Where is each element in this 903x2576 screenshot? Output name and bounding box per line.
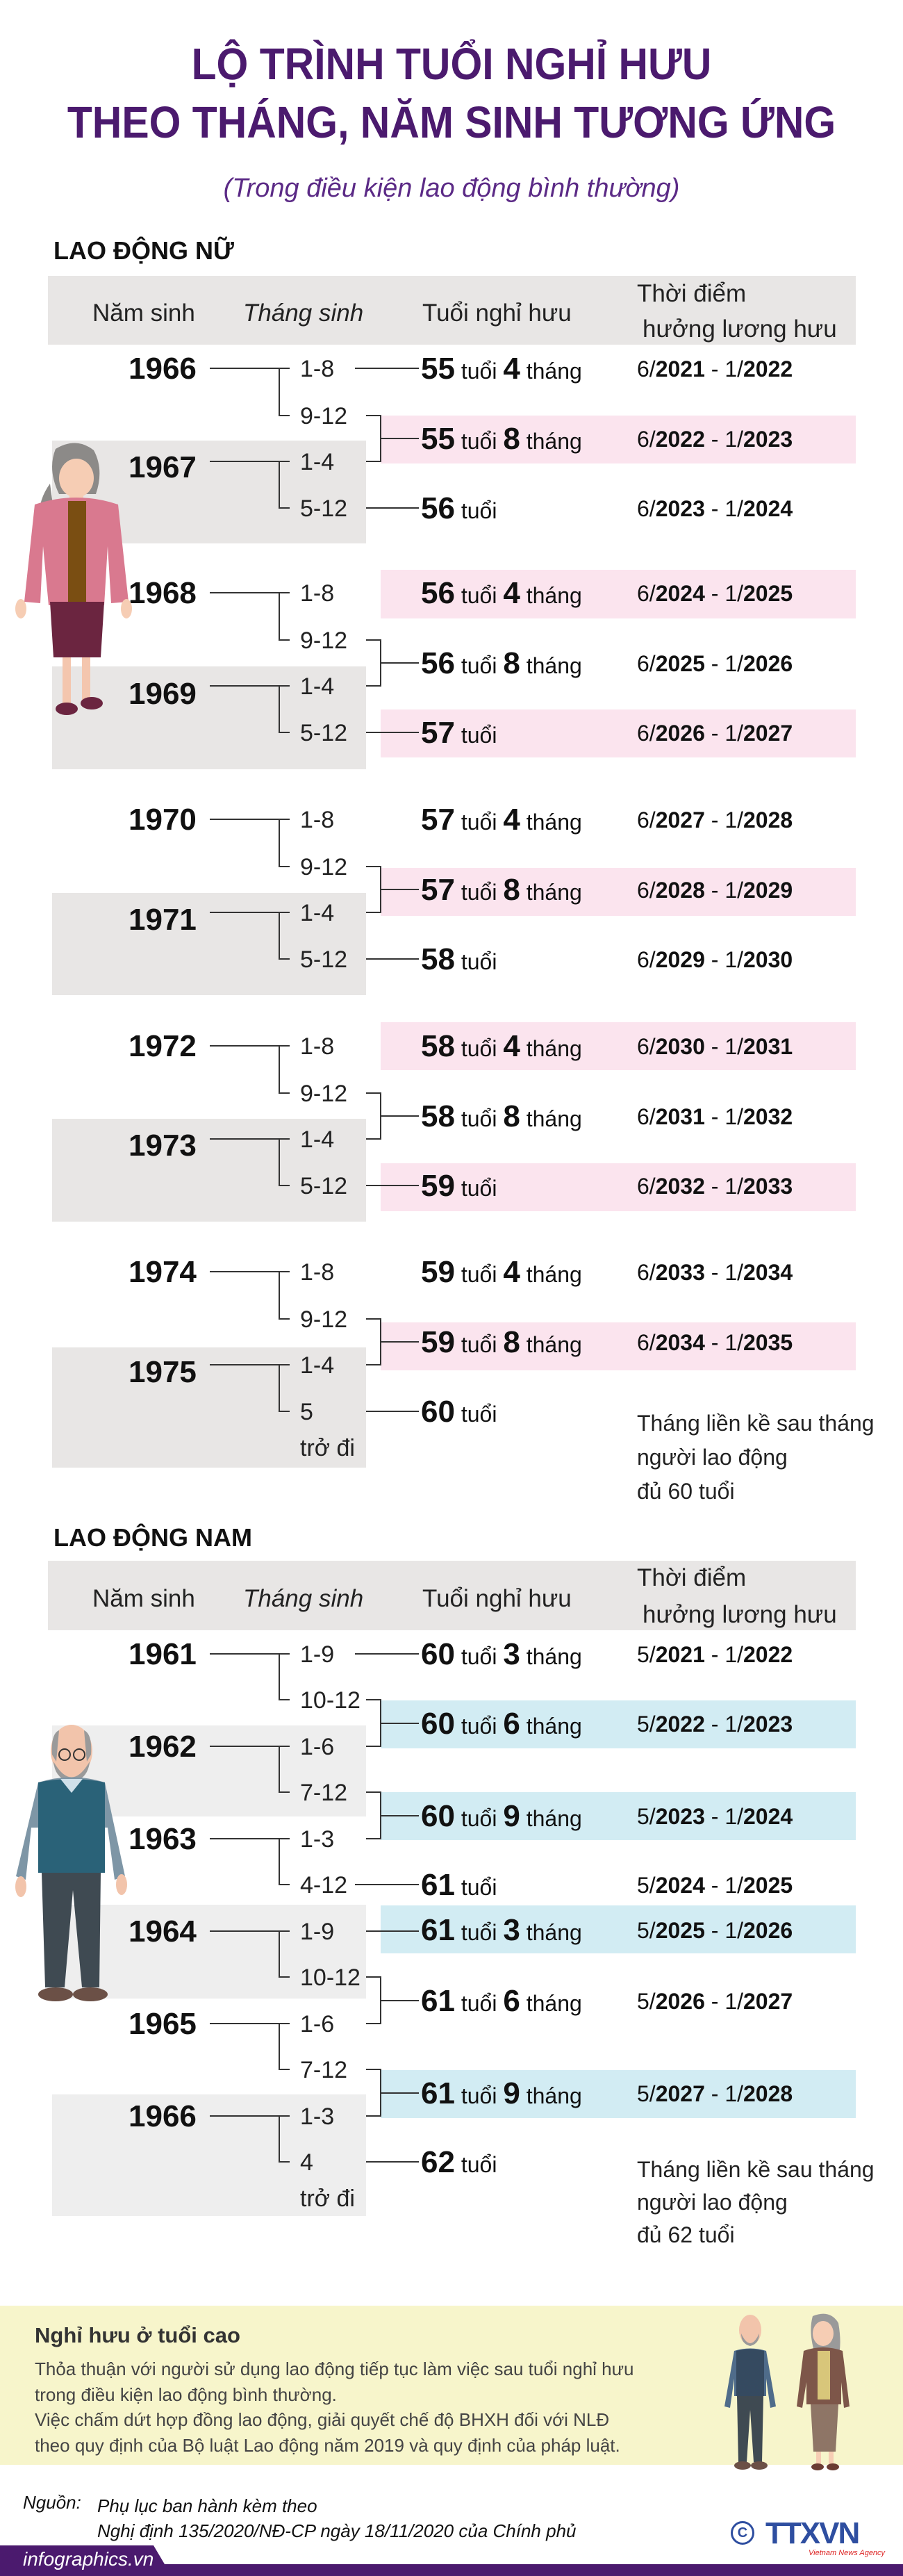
illustration: elderly man (15, 1725, 127, 2001)
men months (300, 1641, 361, 2212)
text: 1975 (129, 1355, 197, 1389)
note: women 1975 (637, 1411, 875, 1504)
title (67, 39, 836, 147)
subtitle: (Trong điều kiện lao động bình thường) (224, 174, 679, 203)
logo: TTXVN: C (738, 2525, 747, 2541)
text: 59 tuổi (421, 1169, 497, 1203)
text: 59 tuổi 4 tháng (421, 1255, 582, 1289)
table header: men: Tháng sinh (243, 1585, 363, 1612)
text: 6/2034 - 1/2035 (637, 1330, 793, 1355)
text: 1974 (129, 1255, 197, 1289)
men years (129, 1637, 197, 2133)
text: 59 tuổi 8 tháng (421, 1325, 582, 1359)
panel body text: Việc chấm dứt hợp đồng lao động, giải quyết chế độ BHXH đối với NLĐ (35, 2409, 609, 2430)
note: men 1966: người lao động (637, 2190, 788, 2215)
text: 1970 (129, 803, 197, 837)
text: 56 tuổi (421, 491, 497, 525)
blue highlight bands (381, 1700, 856, 1748)
text: 5-12 (300, 946, 347, 973)
text: 6/2024 - 1/2025 (637, 581, 793, 606)
text: 58 tuổi 4 tháng (421, 1029, 582, 1063)
table header: men: hưởng lương hưu (643, 1601, 837, 1628)
text: 1-3 (300, 2103, 334, 2130)
text: 5/2025 - 1/2026 (637, 1918, 793, 1943)
women years (129, 352, 197, 1389)
text: 6/2032 - 1/2033 (637, 1174, 793, 1199)
text: 1971 (129, 903, 197, 937)
text: 1-8 (300, 1259, 334, 1286)
text: 6/2021 - 1/2022 (637, 356, 793, 382)
text: 5 (300, 1399, 313, 1425)
table header: men: Thời điểm (637, 1564, 746, 1591)
text: 1973 (129, 1129, 197, 1163)
women pension dates (637, 356, 793, 1355)
panel body text: theo quy định của Bộ luật Lao động năm 2019 và quy định của pháp luật. (35, 2435, 620, 2456)
text: 10-12 (300, 1964, 361, 1991)
footer site name: infographics.vn (23, 2548, 154, 2570)
text: 9-12 (300, 403, 347, 429)
text: 5-12 (300, 495, 347, 522)
note: men 1966: đủ 62 tuổi (637, 2222, 735, 2247)
text: 56 tuổi 4 tháng (421, 576, 582, 610)
text: 60 tuổi 6 tháng (421, 1707, 582, 1741)
note: women 1975: người lao động (637, 1445, 788, 1470)
text: 61 tuổi 3 tháng (421, 1913, 582, 1947)
text: 55 tuổi 4 tháng (421, 352, 582, 386)
text: 5/2021 - 1/2022 (637, 1642, 793, 1667)
text: 4-12 (300, 1872, 347, 1898)
text: 1962 (129, 1730, 197, 1764)
text: 61 tuổi 6 tháng (421, 1984, 582, 2018)
source: Nguồn: (23, 2492, 81, 2513)
illustration: elderly couple (724, 2314, 850, 2470)
grey blocks: women odd years (52, 441, 366, 543)
panel body text (35, 2358, 633, 2456)
table header: women (48, 276, 856, 345)
text: 55 tuổi 8 tháng (421, 422, 582, 456)
note: women 1975: Tháng liền kề sau tháng (637, 1411, 875, 1436)
text: 7-12 (300, 1780, 347, 1806)
pink highlight bands (381, 416, 856, 463)
title: THEO THÁNG, NĂM SINH TƯƠNG ỨNG (67, 97, 836, 147)
text: 1-8 (300, 356, 334, 382)
text: 58 tuổi (421, 942, 497, 976)
heading: lao động nam: LAO ĐỘNG NAM (53, 1523, 252, 1552)
text: 10-12 (300, 1687, 361, 1714)
text: 56 tuổi 8 tháng (421, 646, 582, 680)
text: 1968 (129, 576, 197, 610)
text: 60 tuổi (421, 1395, 497, 1429)
text: 57 tuổi (421, 716, 497, 750)
text: 6/2027 - 1/2028 (637, 807, 793, 832)
text: 1-6 (300, 1734, 334, 1760)
text: 1963 (129, 1822, 197, 1856)
note: men 1966: Tháng liền kề sau tháng (637, 2157, 875, 2182)
text: 6/2022 - 1/2023 (637, 427, 793, 452)
women group 1966 b=530 (210, 368, 419, 508)
source: Nghị định 135/2020/NĐ-CP ngày 18/11/2020 của Chính phủ (97, 2520, 576, 2541)
text: 9-12 (300, 854, 347, 880)
text: 57 tuổi 8 tháng (421, 873, 582, 907)
men retirement ages (421, 1637, 582, 2179)
text: 61 tuổi (421, 1868, 497, 1902)
text: trở đi (300, 2185, 355, 2212)
text: 4 (300, 2149, 313, 2176)
text: 1-4 (300, 1352, 334, 1379)
text: 57 tuổi 4 tháng (421, 803, 582, 837)
text: 5/2026 - 1/2027 (637, 1989, 793, 2014)
text: 6/2033 - 1/2034 (637, 1260, 793, 1285)
text: 61 tuổi 9 tháng (421, 2076, 582, 2110)
text: 1-8 (300, 580, 334, 607)
text: 1-9 (300, 1641, 334, 1668)
text: 1-4 (300, 673, 334, 700)
panel: retiring at older age (0, 2306, 903, 2465)
text: 1-3 (300, 1826, 334, 1853)
footer bar (0, 2545, 903, 2576)
table header: men: Năm sinh (92, 1585, 195, 1612)
text: 1966 (129, 352, 197, 386)
text: 1-6 (300, 2011, 334, 2037)
text: 1972 (129, 1029, 197, 1063)
text: 1-4 (300, 449, 334, 475)
text: 6/2029 - 1/2030 (637, 947, 793, 972)
text: 6/2031 - 1/2032 (637, 1104, 793, 1129)
table header: men: Tuổi nghỉ hưu (422, 1585, 572, 1612)
note: men 1966 (637, 2157, 875, 2247)
text: 1-8 (300, 807, 334, 833)
table header: women: Năm sinh (92, 300, 195, 327)
logo: TTXVN (731, 2516, 885, 2557)
panel body text: trong điều kiện lao động bình thường. (35, 2384, 337, 2405)
text: 9-12 (300, 1306, 347, 1333)
text: 1-8 (300, 1033, 334, 1060)
text: 1-4 (300, 1126, 334, 1153)
text: 5/2027 - 1/2028 (637, 2081, 793, 2106)
text: 1969 (129, 677, 197, 711)
text: 1964 (129, 1914, 197, 1949)
text: 9-12 (300, 1081, 347, 1107)
source (23, 2492, 576, 2541)
logo: TTXVN: TTXVN (765, 2516, 859, 2550)
title: LỘ TRÌNH TUỔI NGHỈ HƯU (192, 39, 711, 89)
heading: lao động nữ: LAO ĐỘNG NỮ (53, 236, 234, 265)
logo: TTXVN: Vietnam News Agency (809, 2549, 885, 2557)
men (210, 1654, 290, 2162)
text: 6/2023 - 1/2024 (637, 496, 793, 521)
text: 6/2025 - 1/2026 (637, 651, 793, 676)
text: 6/2030 - 1/2031 (637, 1034, 793, 1059)
text: 1961 (129, 1637, 197, 1671)
note: women 1975: đủ 60 tuổi (637, 1479, 735, 1504)
text: 6/2028 - 1/2029 (637, 878, 793, 903)
text: 1967 (129, 450, 197, 484)
text: 5-12 (300, 720, 347, 746)
text: 62 tuổi (421, 2145, 497, 2179)
text: 60 tuổi 9 tháng (421, 1799, 582, 1833)
men pension dates (637, 1642, 793, 2106)
table header: women: Tháng sinh (243, 300, 363, 327)
women months (300, 356, 355, 1461)
table header: women: Thời điểm (637, 280, 746, 307)
text: 1966 (129, 2099, 197, 2133)
text: 58 tuổi 8 tháng (421, 1099, 582, 1133)
table header: men (48, 1561, 856, 1630)
women retirement ages (421, 352, 582, 1429)
panel body text: Thỏa thuận với người sử dụng lao động tiếp tục làm việc sau tuổi nghỉ hưu (35, 2358, 633, 2379)
text: 60 tuổi 3 tháng (421, 1637, 582, 1671)
text: 1-4 (300, 900, 334, 926)
text: 1965 (129, 2007, 197, 2041)
text: 5-12 (300, 1173, 347, 1199)
source: Phụ lục ban hành kèm theo (97, 2495, 317, 2516)
text: trở đi (300, 1435, 355, 1461)
grey blocks: men even years (52, 1725, 366, 1816)
table header: women: Tuổi nghỉ hưu (422, 300, 572, 327)
text: 5/2023 - 1/2024 (637, 1804, 793, 1829)
table header: women: hưởng lương hưu (643, 315, 837, 343)
text: 1-9 (300, 1919, 334, 1945)
panel heading: Nghỉ hưu ở tuổi cao (35, 2323, 240, 2347)
text: 9-12 (300, 627, 347, 654)
text: 5/2024 - 1/2025 (637, 1873, 793, 1898)
illustration: elderly woman (15, 443, 132, 715)
text: 7-12 (300, 2057, 347, 2083)
text: 5/2022 - 1/2023 (637, 1712, 793, 1737)
text: 6/2026 - 1/2027 (637, 721, 793, 746)
